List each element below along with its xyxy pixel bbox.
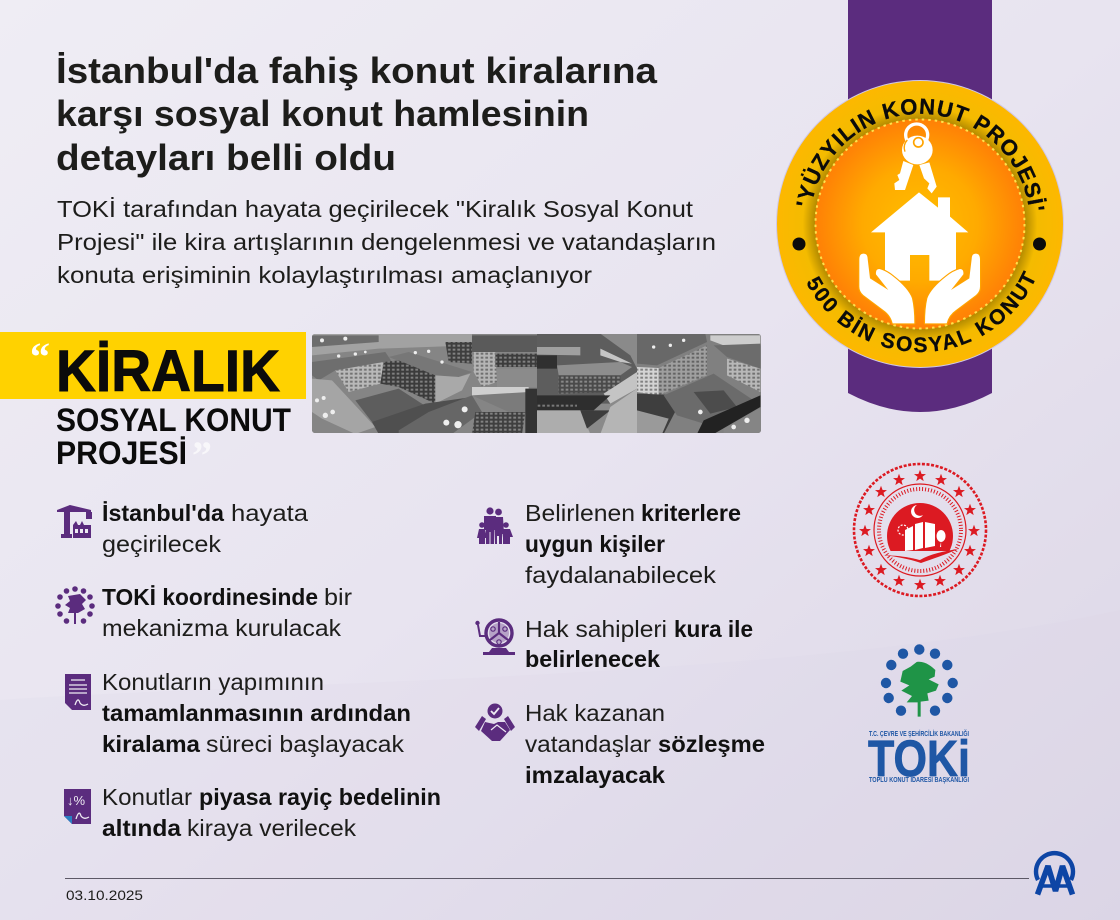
bullet: lottery <box>475 616 753 672</box>
bullet: TOKI: mekanizma kurulacak <box>102 615 342 641</box>
badge text: bottom: 500 BİN SOSYAL KONUT <box>807 270 1035 352</box>
icon: TOKİ tree <box>55 586 95 624</box>
closing quote: ” <box>192 433 212 478</box>
heading: Sosyal Konut Projesi: SOSYAL KONUT <box>56 402 291 438</box>
subtitle: TOKİ tarafından hayata geçirilecek "Kiralık Sosyal Konut <box>57 196 694 222</box>
bullet: criteria: faydalanabilecek <box>525 562 717 588</box>
subtitle: konuta erişiminin kolaylaştırılması amaçlanıyor <box>57 262 592 288</box>
photo: aerial view of housing blocks <box>312 332 762 434</box>
bullet: Istanbul: hayata <box>231 500 308 526</box>
bullet: contract signing: vatandaşlar <box>525 731 651 757</box>
bullet: rental start: Konutların yapımının <box>102 669 324 695</box>
badge dots <box>792 238 1046 250</box>
subtitle: Projesi" ile kira artışlarının dengelenmesi ve vatandaşların <box>57 229 716 255</box>
icon: percent contract <box>64 789 91 824</box>
bullet: below market: piyasa rayiç bedelinin <box>199 784 441 810</box>
footer rule <box>65 878 1029 879</box>
bullets: right column <box>475 500 765 788</box>
bullet: rental start <box>65 669 411 757</box>
bullet: TOKI: bir <box>324 584 352 610</box>
bullet: criteria: kriterlere <box>641 500 741 526</box>
heading: Kiralık: KİRALIK <box>56 339 280 404</box>
title <box>56 50 658 178</box>
bullet: below market: altında <box>102 815 181 841</box>
bullet: contract signing <box>475 700 765 788</box>
bullets: left column <box>55 500 441 841</box>
logo: AA <box>1036 853 1073 894</box>
icon: keys, house and hands <box>859 124 980 323</box>
logo tree <box>900 662 939 717</box>
heading: Sosyal Konut Projesi: PROJESİ <box>56 435 187 471</box>
icon: family <box>477 507 513 544</box>
icon: percent contract: ↓% <box>67 793 86 808</box>
bullet: below market: Konutlar <box>102 784 192 810</box>
bullet: rental start: kiralama <box>102 731 200 757</box>
icon: handshake with check <box>475 704 515 741</box>
bullet: lottery: Hak sahipleri <box>525 616 667 642</box>
icon: crane and building <box>57 505 92 538</box>
subtitle <box>57 196 716 288</box>
icon: contract <box>65 674 91 710</box>
yellow banner <box>0 332 306 399</box>
bullet: lottery: belirlenecek <box>525 646 660 672</box>
title: detayları belli oldu <box>56 137 396 178</box>
badge text: top: 'YÜZYILIN KONUT PROJESİ' <box>796 98 1047 210</box>
logo: ministry seal <box>854 464 986 596</box>
badge: Yüzyılın Konut Projesi <box>776 80 1064 368</box>
logo: TOKİ <box>868 644 970 787</box>
title: karşı sosyal konut hamlesinin <box>56 93 589 134</box>
bullet: contract signing: Hak kazanan <box>525 700 665 726</box>
logo dots <box>881 644 958 716</box>
date: 03.10.2025 <box>66 887 143 903</box>
opening quote: “ <box>30 334 50 379</box>
bullet: contract signing: sözleşme <box>658 731 765 757</box>
bullet: criteria <box>477 500 741 588</box>
bullet: TOKI: TOKİ koordinesinde <box>102 584 318 610</box>
logo text: TOPLU KONUT İDARESİ BAŞKANLIĞI <box>869 775 969 784</box>
title: İstanbul'da fahiş konut kiralarına <box>56 50 658 91</box>
heading: Sosyal Konut Projesi <box>56 402 291 471</box>
bullet: below market <box>64 784 441 841</box>
bullet: lottery: kura ile <box>674 616 753 642</box>
bullet: TOKI <box>55 584 352 641</box>
bullet: contract signing: imzalayacak <box>525 762 665 788</box>
bullet: criteria: Belirlenen <box>525 500 635 526</box>
logo text: TOKi <box>868 730 970 787</box>
bullet: criteria: uygun kişiler <box>525 531 665 557</box>
ribbon <box>848 0 992 412</box>
bullet: Istanbul: İstanbul'da <box>102 500 224 526</box>
bullet: rental start: süreci başlayacak <box>206 731 405 757</box>
logo text: T.C. ÇEVRE VE ŞEHİRCİLİK BAKANLIĞI <box>869 729 969 738</box>
bullet: Istanbul: geçirilecek <box>102 531 222 557</box>
bullet: rental start: tamamlanmasının ardından <box>102 700 411 726</box>
icon: lottery drum <box>475 620 515 655</box>
bullet: Istanbul <box>57 500 308 557</box>
bullet: below market: kiraya verilecek <box>187 815 357 841</box>
